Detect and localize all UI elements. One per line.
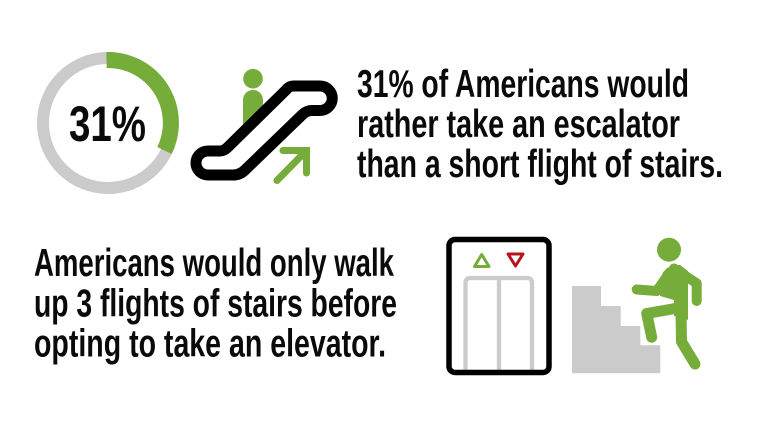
climber head: [657, 238, 681, 262]
text block: escalator statistic: [357, 63, 723, 186]
icon: person climbing stairs: [637, 238, 697, 364]
climber torso: [660, 265, 688, 320]
icon: elevator: [449, 240, 549, 372]
up arrow: [277, 150, 306, 180]
donut percentage label: 31%: [69, 96, 146, 152]
down button: [508, 254, 523, 266]
escalator outline: [196, 86, 332, 175]
person head: [243, 69, 263, 88]
icon: stairs: [572, 286, 660, 373]
donut chart: 31%: [43, 58, 173, 188]
text block: elevator statistic: Americans would only walk: [34, 242, 394, 285]
climber legs: [647, 308, 678, 337]
text block: elevator statistic: opting to take an elevator.: [34, 322, 386, 366]
elevator frame: [449, 240, 549, 372]
up button: [474, 254, 489, 266]
text block: elevator statistic: [34, 242, 397, 366]
elevator doors: [466, 278, 532, 371]
icon: person on escalator with up arrow: [196, 69, 332, 180]
text block: elevator statistic: up 3 flights of stairs before: [34, 282, 397, 326]
climber arms: [637, 268, 697, 301]
person body: [243, 90, 263, 126]
